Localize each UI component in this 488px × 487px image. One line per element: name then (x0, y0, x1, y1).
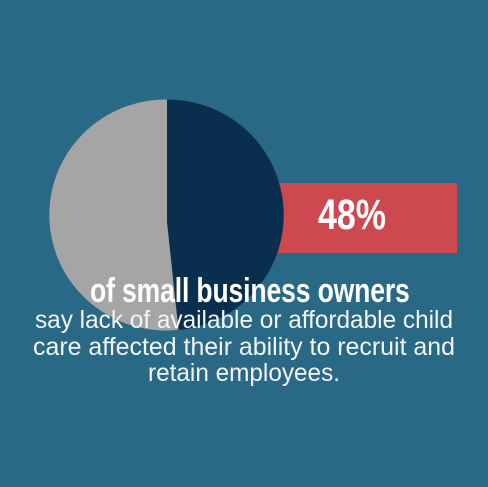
text block: description: retain employees. (148, 359, 340, 387)
percentage value: 48% (318, 191, 386, 239)
pie slice: 48% (167, 99, 284, 330)
text block: description: say lack of available or affordable child (35, 306, 453, 334)
heading: of small business owners (90, 272, 410, 310)
callout: red percentage bar (270, 183, 457, 253)
pie chart (49, 99, 284, 331)
pie slice: remaining 52% (49, 100, 283, 330)
text block: description (33, 306, 455, 387)
text block: description: care affected their ability to recruit and (33, 333, 455, 361)
